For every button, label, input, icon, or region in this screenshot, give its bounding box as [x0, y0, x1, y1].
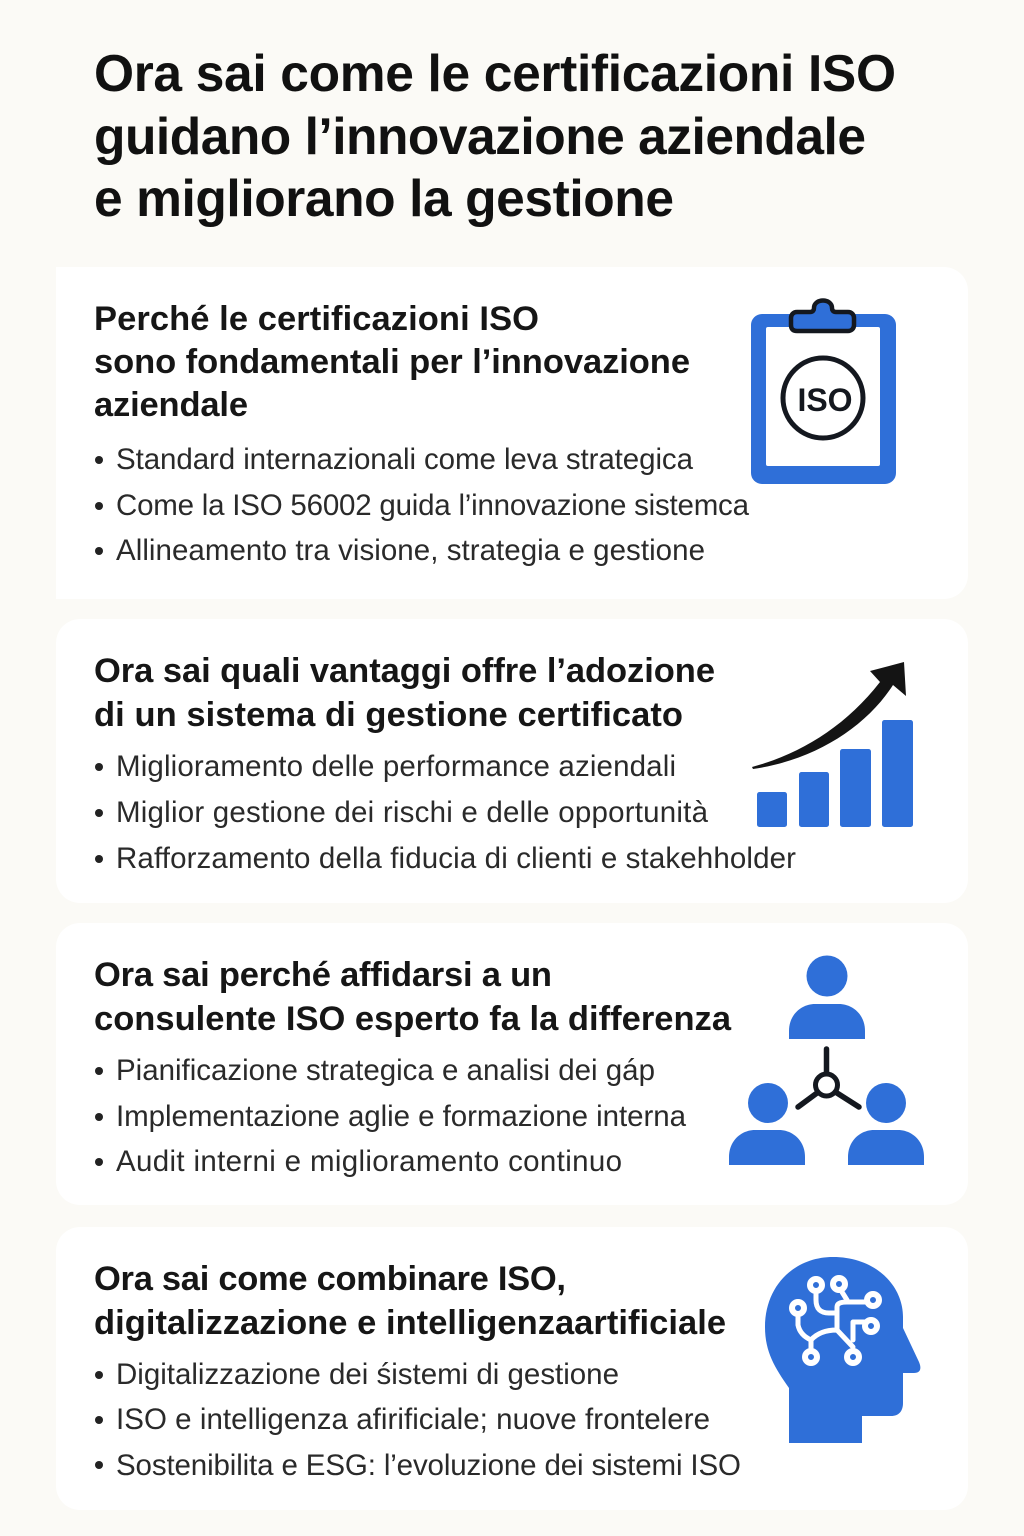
icon: team network: [729, 956, 924, 1165]
title: Ora sai come le certificazioni ISO: [94, 44, 896, 102]
title: guidano l’innovazione aziendale: [94, 107, 866, 165]
heading: vantaggi: [94, 652, 715, 734]
heading: consulente: Ora sai perché affidarsi a un: [94, 956, 552, 994]
bullet list: ISO e AI: [95, 1358, 741, 1482]
bullet list: certificazioni: Come la ISO 56002 guida l’innovazione sistemca: [116, 489, 750, 522]
heading: perché le certificazioni: [94, 300, 690, 424]
bullet list: certificazioni: Allineamento tra visione, strategia e gestione: [116, 534, 705, 567]
bullet list: vantaggi: Rafforzamento della fiducia di clienti e stakehholder: [116, 842, 796, 875]
heading: perché le certificazioni: sono fondamentali per l’innovazione: [94, 343, 690, 381]
icon: clipboard ISO: ISO: [797, 382, 853, 418]
heading: ISO e AI: Ora sai come combinare ISO,: [94, 1260, 566, 1298]
icon: head with circuit brain: [765, 1257, 920, 1443]
heading: ISO e AI: digitalizzazione e intelligenzaartificiale: [94, 1304, 726, 1342]
panel: perché le certificazioni ISO: [56, 267, 968, 599]
panel: vantaggi: [56, 619, 968, 903]
bullet list: consulente: Pianificazione strategica e analisi dei gáp: [116, 1054, 655, 1087]
bullet list: certificazioni: [95, 443, 750, 567]
icon: growth bar chart with arrow: [752, 662, 913, 827]
title: e migliorano la gestione: [94, 169, 674, 227]
icon: clipboard ISO: [751, 300, 896, 484]
bullet list: ISO e AI: Sostenibilita e ESG: l’evoluzione dei sistemi ISO: [116, 1449, 741, 1482]
panel: ISO e intelligenza artificiale: [56, 1227, 968, 1510]
heading: vantaggi: Ora sai quali vantaggi offre l’adozione: [94, 652, 715, 690]
heading: perché le certificazioni: aziendale: [94, 386, 248, 424]
heading: consulente: consulente ISO esperto fa la differenza: [94, 1000, 732, 1038]
bullet list: ISO e AI: Digitalizzazione dei śistemi di gestione: [116, 1358, 619, 1391]
bullet list: certificazioni: Standard internazionali come leva strategica: [116, 443, 694, 476]
bullet list: ISO e AI: ISO e intelligenza afirificiale; nuove frontelere: [116, 1403, 710, 1436]
bullet list: vantaggi: [95, 750, 796, 875]
heading: perché le certificazioni: Perché le certificazioni ISO: [94, 300, 539, 338]
heading: vantaggi: di un sistema di gestione certificato: [94, 696, 683, 734]
bullet list: consulente: Implementazione aglie e formazione interna: [116, 1100, 687, 1133]
bullet list: vantaggi: Miglioramento delle performance aziendali: [116, 750, 676, 783]
panel: consulente: [56, 923, 968, 1205]
title: [94, 44, 896, 227]
bullet list: consulente: [95, 1054, 687, 1178]
bullet list: vantaggi: Miglior gestione dei rischi e delle opportunità: [116, 796, 709, 829]
heading: ISO e AI: [94, 1260, 726, 1342]
heading: consulente: [94, 956, 732, 1038]
bullet list: consulente: Audit interni e miglioramento continuo: [116, 1145, 622, 1178]
